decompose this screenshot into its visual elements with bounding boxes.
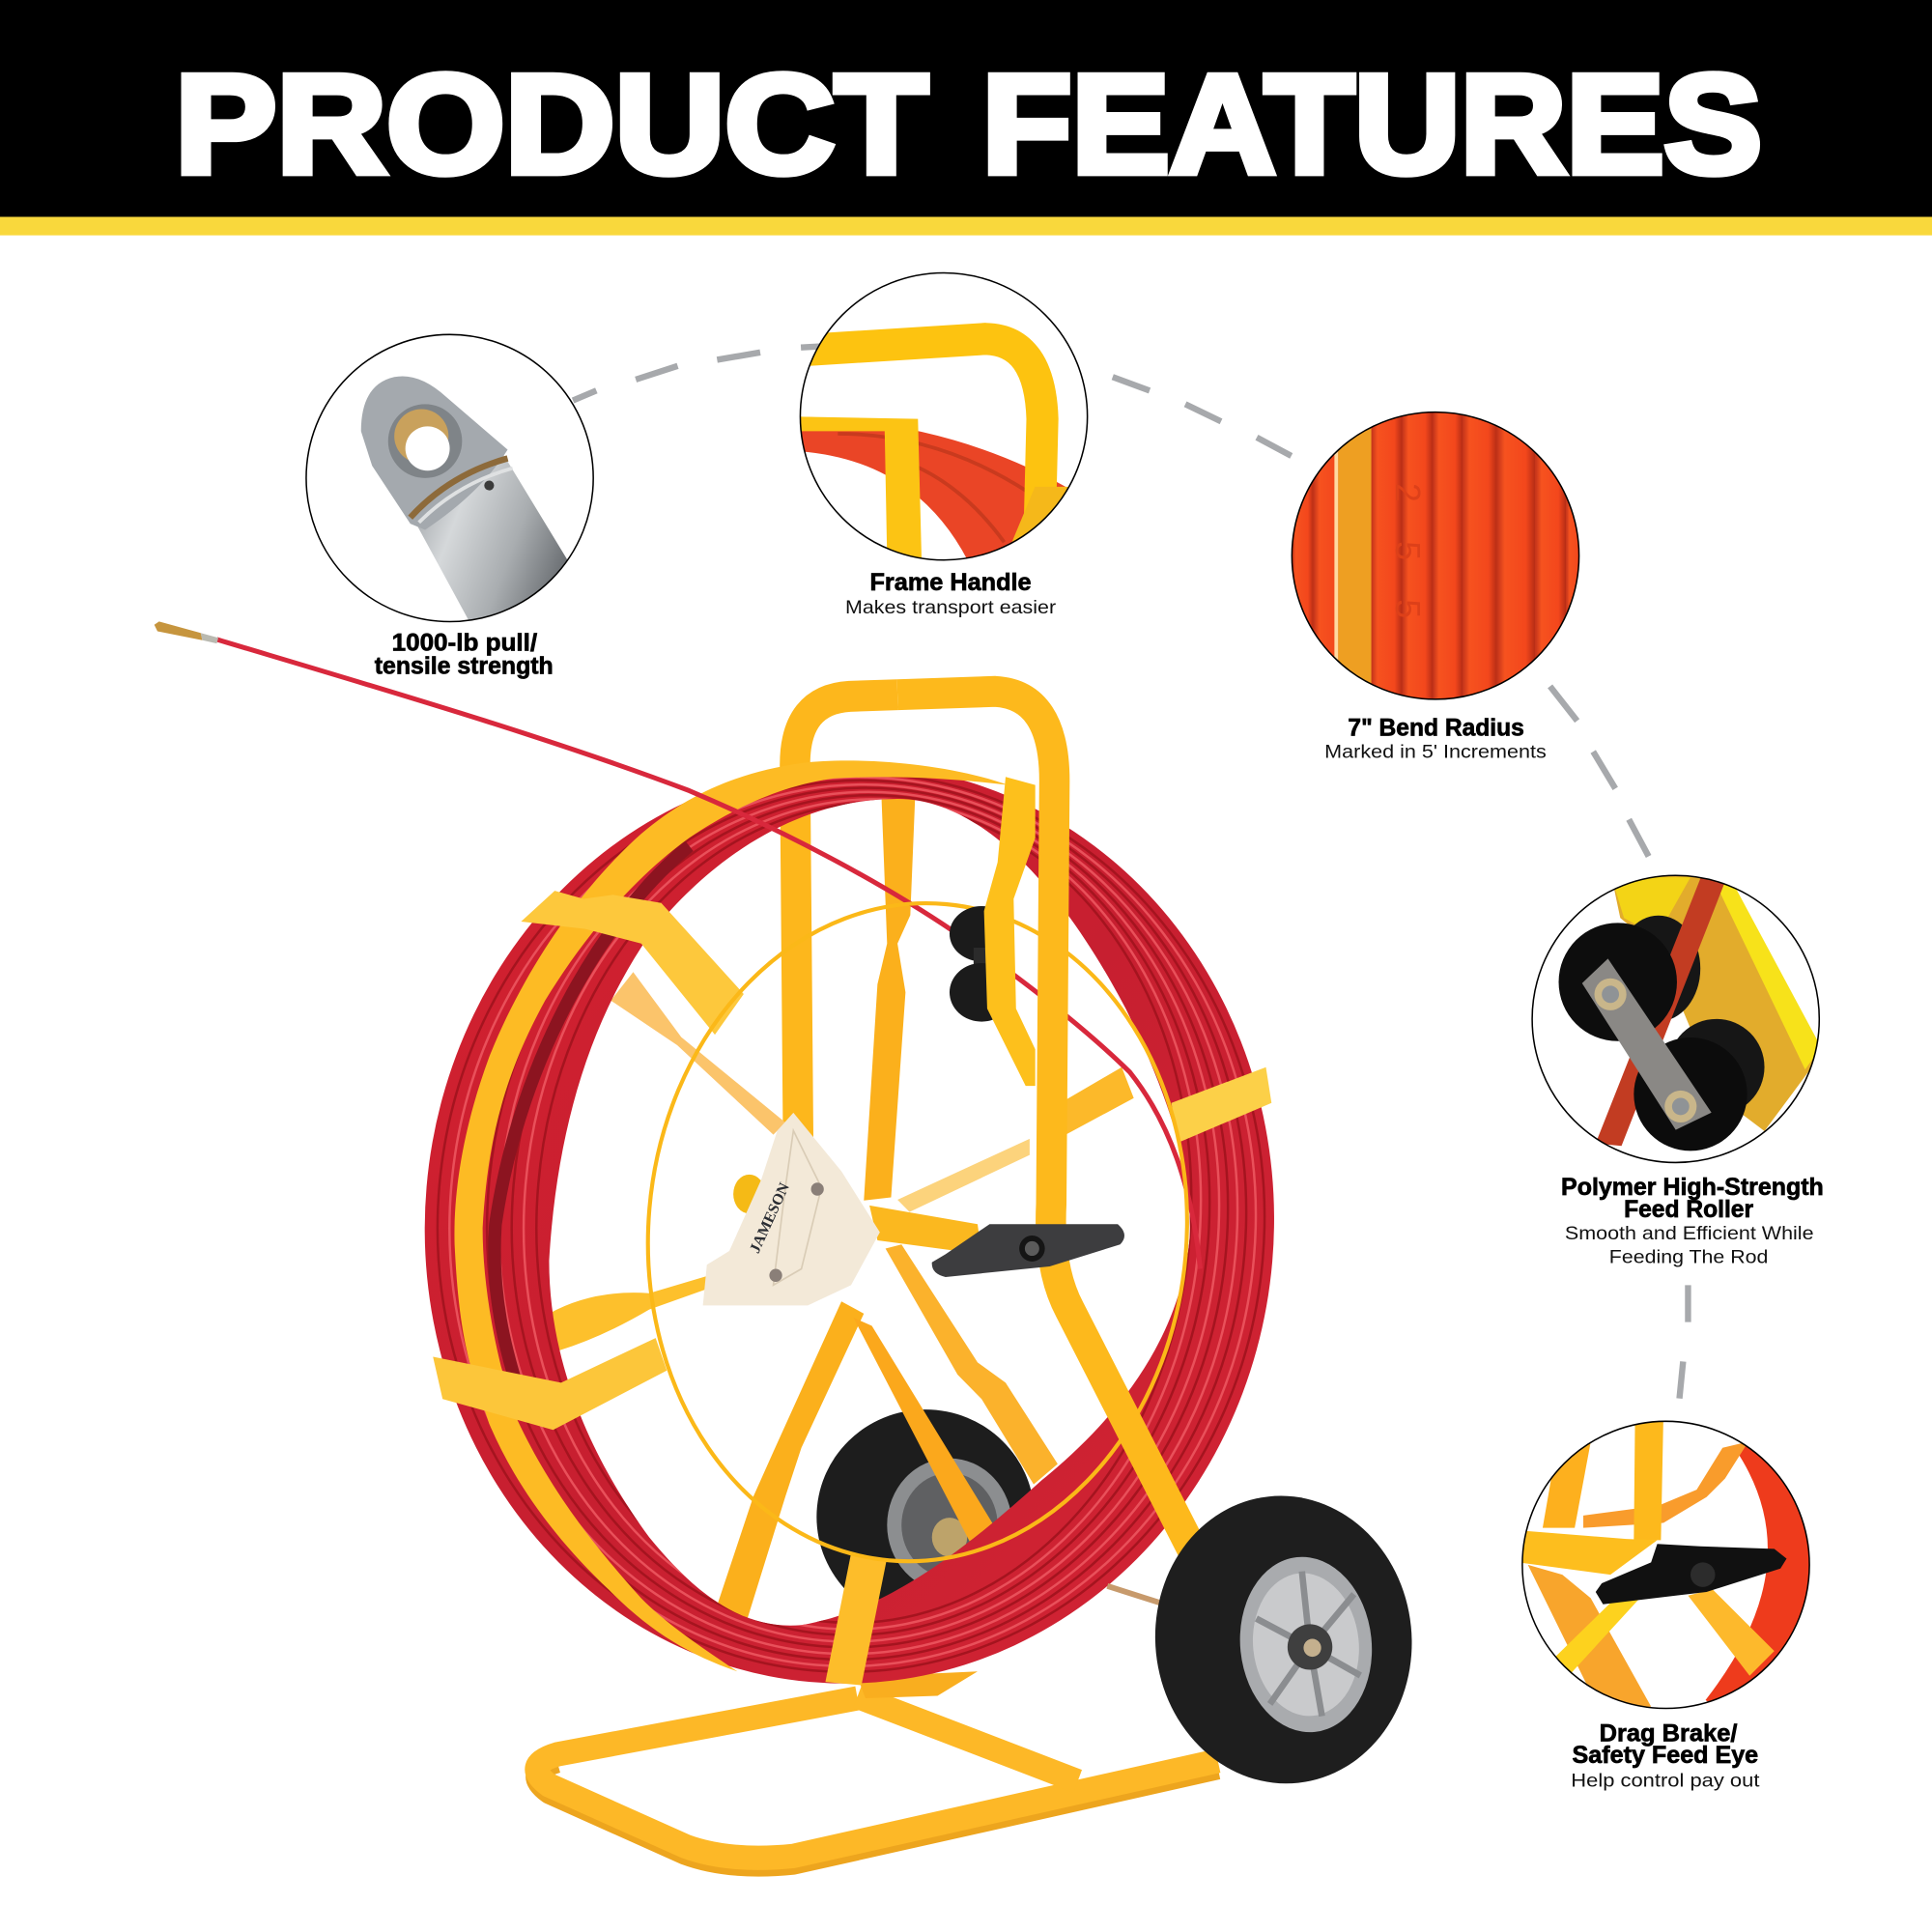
front wheel axle	[1107, 1586, 1163, 1604]
product: fiberglass rod reel on cart	[155, 621, 1426, 1865]
panel: frame handle inset	[788, 273, 1088, 567]
eye bolt image	[361, 376, 579, 631]
panel: eye bolt inset	[306, 334, 593, 631]
upper left strap	[521, 891, 744, 1035]
lower right spoke	[853, 1318, 994, 1542]
upper left spoke	[611, 972, 785, 1135]
panel: feed roller inset	[1532, 872, 1821, 1162]
cart base frame	[537, 1671, 1218, 1865]
label: frame handle: Makes transport easier	[845, 597, 1057, 618]
label: feed roller: Feed Roller	[1624, 1196, 1753, 1223]
hub axle	[869, 1206, 981, 1254]
label: drag brake: Help control pay out	[1571, 1770, 1760, 1791]
panel: bend radius inset	[1292, 407, 1583, 702]
brand name: JAMESON	[747, 1180, 793, 1256]
right strap	[1172, 1067, 1271, 1143]
coil of red rod	[425, 760, 1274, 1684]
front wheel	[1141, 1483, 1426, 1797]
label: feed roller: Feeding The Rod	[1609, 1246, 1768, 1267]
feed roller image	[1559, 872, 1821, 1151]
label: drag brake: Drag Brake/	[1600, 1719, 1738, 1747]
yellow knob	[733, 1175, 765, 1213]
rod bundle image	[1292, 407, 1583, 702]
lower left strap	[433, 1338, 667, 1430]
yellow coil band	[454, 760, 1008, 1671]
lower spoke	[715, 1301, 864, 1620]
center upright spoke	[864, 797, 915, 1201]
right spoke	[897, 1139, 1030, 1212]
lower left spoke	[549, 1275, 713, 1351]
canvas bag	[703, 1113, 880, 1305]
feed roller bracket	[984, 777, 1036, 1086]
label: frame handle	[845, 569, 1057, 618]
label: bend radius	[1324, 714, 1547, 762]
dashed connector arc	[573, 346, 1688, 1399]
title: FEATURES	[982, 45, 1762, 203]
header banner	[0, 0, 1932, 236]
right lower spoke	[886, 1244, 1058, 1485]
title: PRODUCT	[175, 45, 927, 203]
bottom strap	[825, 1553, 886, 1686]
panel: drag brake inset	[1518, 1417, 1809, 1716]
label: frame handle: Frame Handle	[870, 569, 1032, 596]
rod tip	[155, 621, 218, 643]
label: tensile strength: 1000-lb pull/	[392, 629, 537, 656]
label: feed roller: Polymer High-Strength	[1561, 1174, 1824, 1201]
label: feed roller	[1561, 1174, 1824, 1267]
label: drag brake: Safety Feed Eye	[1573, 1742, 1758, 1769]
label: bend radius: 7" Bend Radius	[1348, 714, 1524, 741]
T-handle drag brake	[932, 1224, 1124, 1277]
wire hoop	[621, 880, 1214, 1584]
left handle leg	[795, 695, 897, 1139]
frame handle image	[788, 339, 1072, 567]
length markings: 2 5 5	[1388, 483, 1427, 618]
label: bend radius: Marked in 5' Increments	[1324, 741, 1547, 762]
label: tensile strength	[375, 629, 554, 680]
reel spokes	[549, 797, 1134, 1620]
dark inner coil shadow	[495, 846, 690, 1399]
rear wheel	[816, 1409, 1035, 1624]
label: drag brake	[1571, 1719, 1760, 1791]
feed rollers	[950, 906, 1013, 1022]
title	[175, 45, 1762, 203]
label: tensile strength: tensile strength	[375, 653, 554, 680]
main handle	[897, 692, 1192, 1549]
drag brake image	[1518, 1417, 1792, 1716]
label: feed roller: Smooth and Efficient While	[1565, 1223, 1814, 1244]
rod over coil	[216, 639, 1200, 1269]
